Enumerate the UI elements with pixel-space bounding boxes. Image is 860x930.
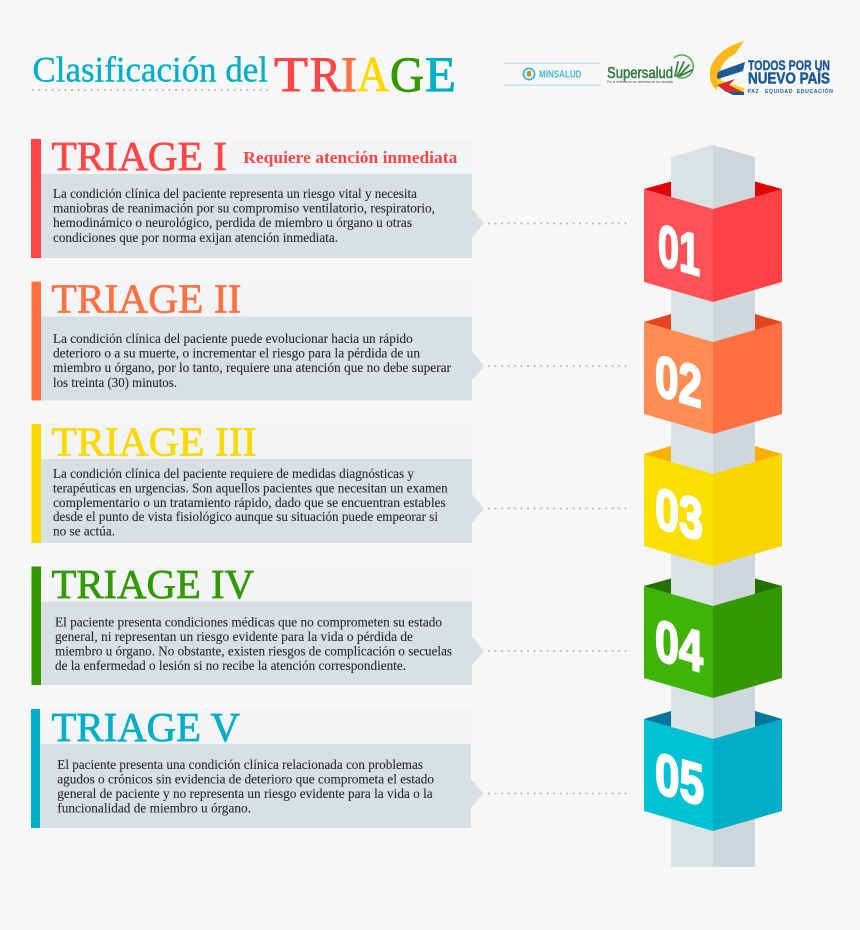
text block: Triage III description: terapéuticas en urgencias. Son aquellos pacientes que necesitan un examen (53, 480, 448, 495)
text block: Triage I description: hemodinámico o neurológico, perdida de miembro u órgano u otras (53, 215, 412, 230)
logo: Supersalud: Supersalud (607, 65, 673, 82)
text block: Triage III description: complementario o un tratamiento rápido, dado que se encuentran estables (53, 495, 446, 510)
text block: Triage V description: El paciente presenta una condición clínica relacionada con problemas (57, 757, 423, 772)
title: Clasificación del TRIAGE: T (274, 46, 308, 102)
title: Clasificación del TRIAGE: E (425, 46, 456, 102)
cube 02: 02 (655, 342, 702, 421)
text block: Triage V description: general de paciente y no representa un riesgo evidente para la vida o la (57, 786, 433, 801)
text block: Triage IV description (55, 615, 452, 673)
cube 05 (644, 719, 782, 831)
text block: Triage V description: agudos o crónicos sin evidencia de deterioro que comprometa el estado (57, 771, 434, 786)
heading: Triage I: TRIAGE I (52, 133, 227, 179)
text block: Triage V description: funcionalidad de miembro u órgano. (57, 800, 251, 815)
logo: Minsalud: MINSALUD (539, 70, 582, 81)
heading: Triage V: TRIAGE V (52, 704, 240, 750)
column (671, 145, 755, 867)
panel: Triage III (32, 418, 484, 543)
text block: Triage IV description: general, ni representan un riesgo evidente para la vida o pérdida de (55, 629, 413, 644)
title: Clasificación del TRIAGE: Clasificación del (32, 50, 268, 90)
text block: Triage I description: condiciones que por norma exijan atención inmediata. (53, 230, 338, 245)
panel: Triage V (31, 704, 484, 828)
text block: Triage II description: La condición clínica del paciente puede evolucionar hacia un rápido (53, 331, 413, 346)
text block: Triage V description (57, 757, 434, 815)
logo: Minsalud (504, 62, 600, 86)
logo: Todos por un nuevo país: NUEVO PAÍS (748, 70, 830, 88)
title: Clasificación del TRIAGE: G (390, 46, 424, 102)
text block: Triage III description: desde el punto de vista fisiológico aunque su situación puede empeorar si (53, 509, 438, 524)
title: Clasificación del TRIAGE (32, 46, 456, 102)
title: Clasificación del TRIAGE: A (357, 46, 389, 102)
logo: Todos por un nuevo país: TODOS POR UN (748, 57, 830, 73)
text block: Triage I description: La condición clínica del paciente representa un riesgo vital y necesita (53, 186, 417, 201)
text block: Triage I description (53, 186, 435, 245)
logo: Supersalud: Por la defensa de los derechos de los usuarios (607, 80, 673, 84)
heading: Triage IV: TRIAGE IV (52, 561, 254, 607)
text block: Triage II description: deterioro o a su muerte, o incrementar el riesgo para la pérdida de un (53, 346, 420, 360)
text block: Triage IV description: El paciente presenta condiciones médicas que no comprometen su estado (55, 615, 442, 630)
logo: Todos por un nuevo país: PAZ (748, 89, 760, 95)
text block: Triage III description: no se actúa. (53, 524, 115, 539)
panel: Triage I (31, 133, 484, 258)
text block: Triage III description: La condición clínica del paciente requiere de medidas diagnósticas y (53, 466, 414, 481)
cube 04 (644, 586, 782, 698)
text block: Triage IV description: de la enfermedad o lesión si no recibe la atención correspondiente. (55, 658, 406, 673)
cube 03: 03 (655, 474, 703, 554)
logo: Todos por un nuevo país: EDUCACIÓN (797, 87, 834, 95)
panel: Triage IV (32, 561, 484, 685)
subheading: Requiere atención inmediata: Requiere atención inmediata (243, 148, 457, 167)
cube 05: 05 (655, 739, 704, 819)
text block: Triage III description (53, 466, 448, 539)
text block: Triage II description: los treinta (30) minutos. (53, 375, 177, 391)
cube back flaps (644, 182, 782, 730)
heading: Triage III: TRIAGE III (52, 418, 256, 464)
text block: Triage II description: miembro u órgano, por lo tanto, requiere una atención que no debe superar (53, 360, 451, 375)
cube 03 (644, 454, 782, 566)
text block: Triage II description (53, 331, 451, 391)
cube 01: 01 (658, 211, 700, 289)
panel: Triage II (32, 276, 484, 400)
title: Clasificación del TRIAGE: I (341, 46, 357, 102)
logo: Todos por un nuevo país (710, 41, 834, 95)
cube 04: 04 (655, 606, 703, 686)
chart: stacked cube column (644, 145, 782, 867)
title: Clasificación del TRIAGE: R (310, 46, 342, 102)
cube 01 (644, 189, 782, 302)
text block: Triage I description: maniobras de reanimación por su compromiso ventilatorio, respiratorio, (53, 201, 435, 216)
heading: Triage II: TRIAGE II (52, 276, 242, 322)
logo: Todos por un nuevo país: EQUIDAD (765, 89, 793, 95)
logo: Supersalud (607, 55, 693, 84)
cube 02 (644, 322, 782, 434)
text block: Triage IV description: miembro u órgano. No obstante, existen riesgos de complicación o secuelas (55, 644, 452, 659)
